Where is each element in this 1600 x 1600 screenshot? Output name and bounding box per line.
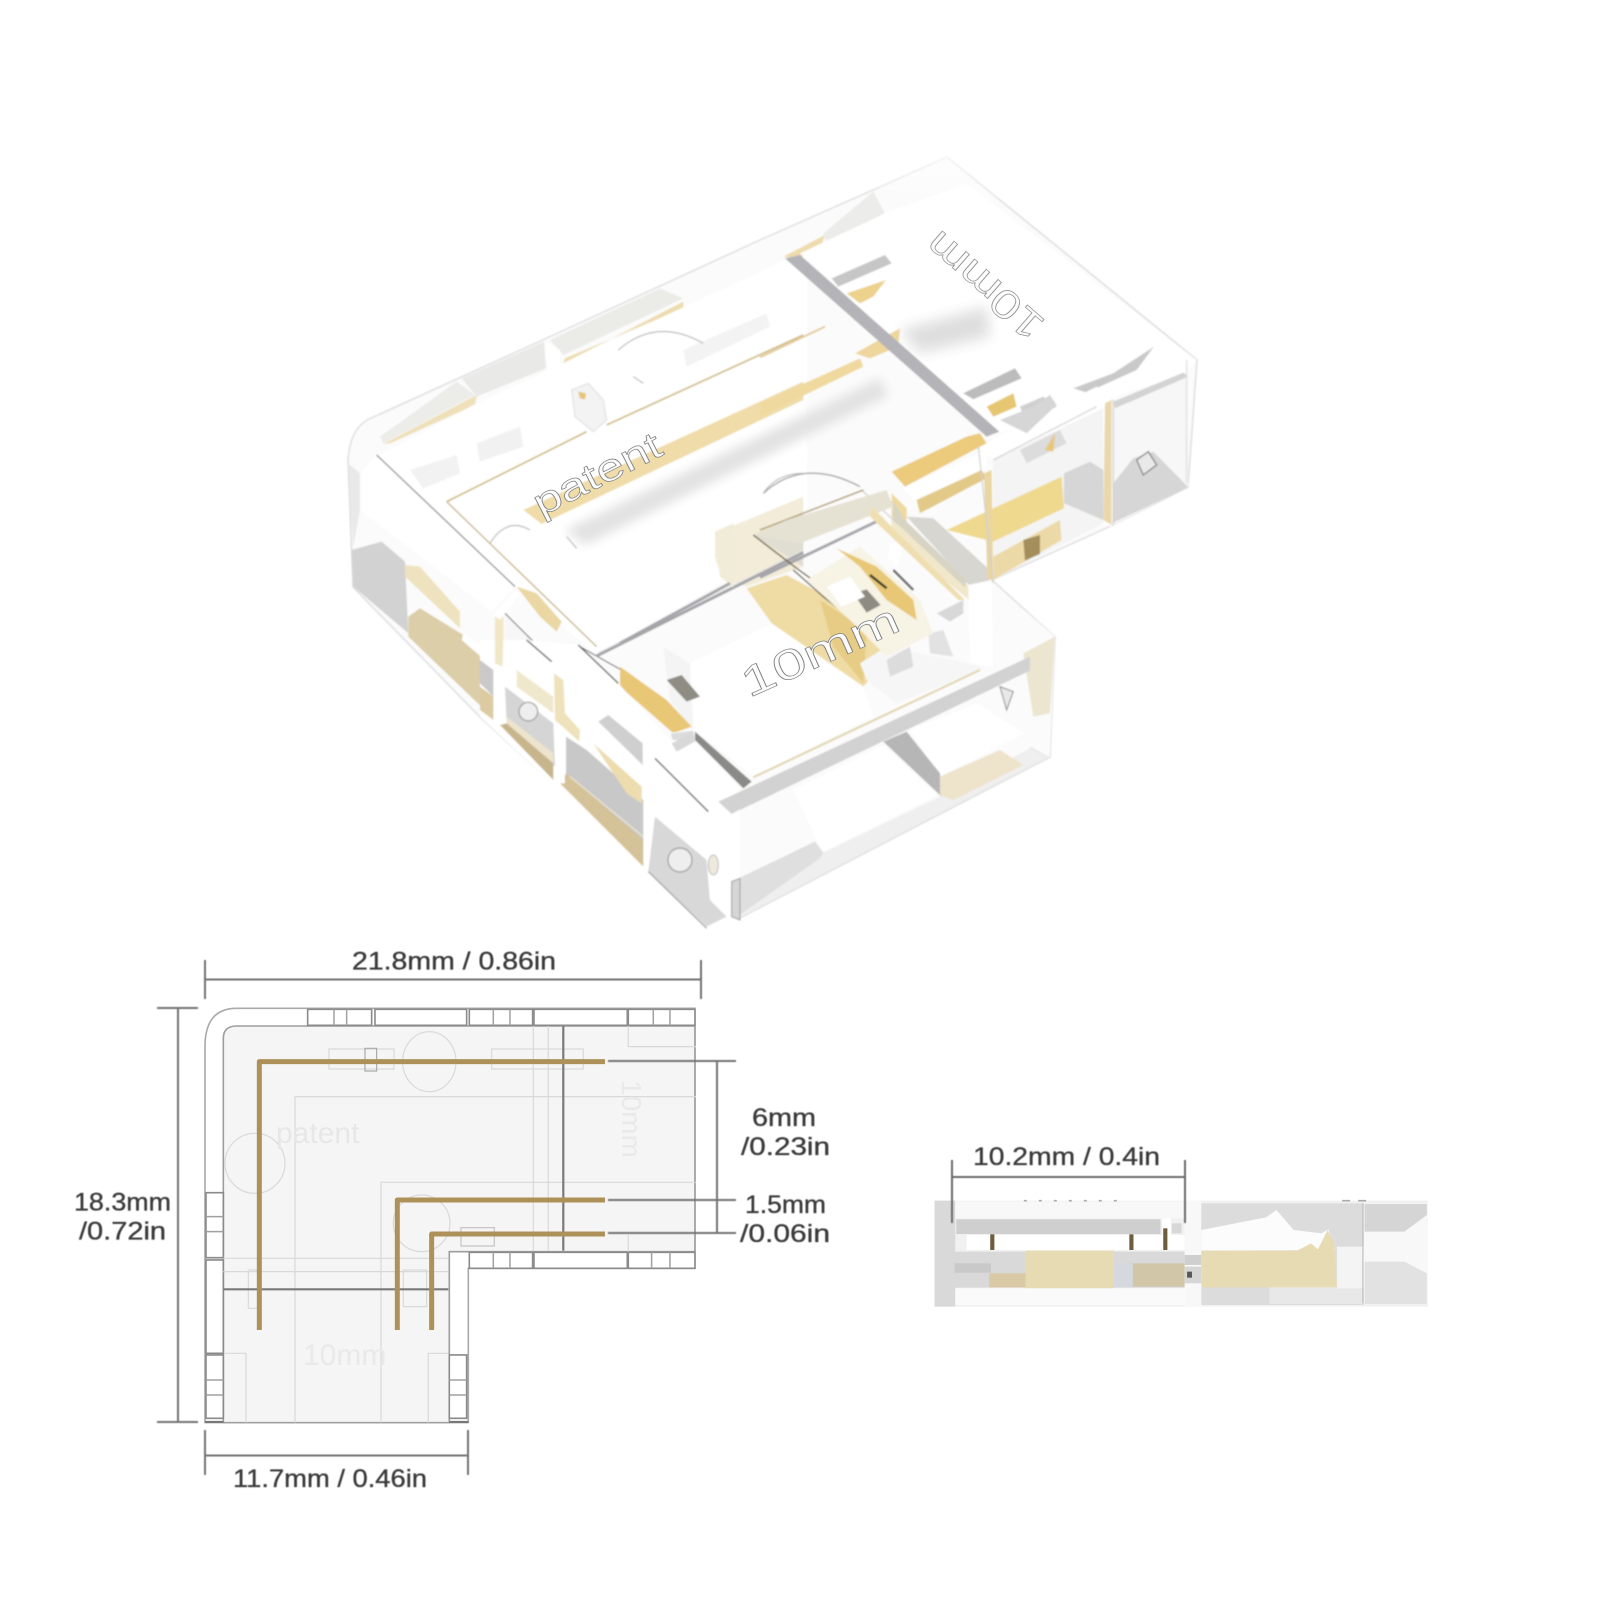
gold conductor traces: [259, 1062, 605, 1330]
contact pins: [990, 1228, 1167, 1250]
faint embossed text: 10mm: 10mm: [303, 1339, 386, 1372]
lower-left side wall with screws and tabs: [480, 640, 780, 930]
right arm of the connector: [760, 183, 1197, 603]
width dimension line: [952, 1160, 1185, 1223]
embossed lettering: upper 10mm: 10mm: [917, 222, 1053, 348]
soft shadow below gold stripe: [565, 378, 888, 545]
dimension labels: 18.3mm: [74, 1188, 171, 1216]
width label: 10.2mm / 0.4in: [973, 1143, 1160, 1171]
side profile body: [935, 1201, 1428, 1307]
fade at far corner: [850, 120, 1080, 215]
dimension labels: /0.72in: [79, 1218, 166, 1246]
faint embossed text: vertical 10mm: 10mm: [616, 1080, 647, 1158]
connector silhouette: [348, 157, 1197, 927]
product photo: transparent L connector: [348, 120, 1197, 930]
side-view dimension drawing: [935, 1143, 1428, 1307]
top-view dimension drawing: [74, 948, 830, 1493]
dimension labels: 11.7mm / 0.46in: [233, 1465, 427, 1493]
dimension lines: [157, 960, 736, 1475]
dimension labels: /0.23in: [741, 1133, 830, 1161]
faint embossed text: patent: patent: [276, 1117, 360, 1150]
left and upper part of the connector: [348, 250, 807, 753]
dimension labels: 1.5mm: [745, 1191, 826, 1219]
dimension labels: /0.06in: [740, 1220, 830, 1248]
lower arm of the connector: [620, 490, 1055, 922]
embossed lettering: lower 10mm: 10mm: [734, 595, 906, 706]
dimension labels: 6mm: [752, 1104, 816, 1132]
connector plan body: [205, 1008, 696, 1423]
dimension labels: 21.8mm / 0.86in: [352, 948, 556, 976]
embossed lettering: patent: patent: [526, 424, 669, 525]
dimension labels: [74, 948, 830, 1493]
